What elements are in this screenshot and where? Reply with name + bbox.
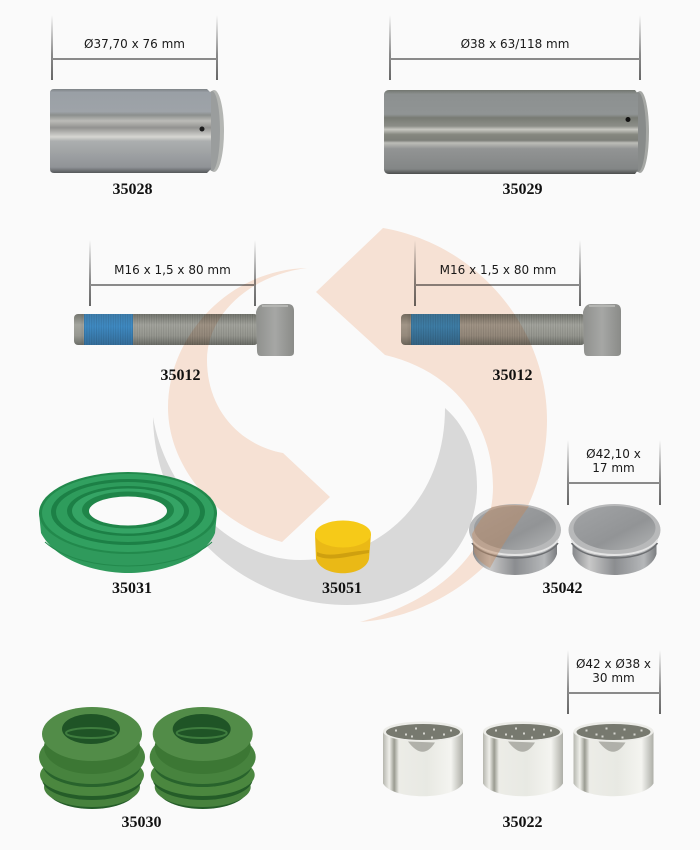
dimension: 35022: 30 mm — [592, 671, 635, 685]
part: bushing 3 35022 — [574, 722, 654, 796]
part: yellow plug 35051 — [315, 520, 371, 573]
label: 35042: 35042 — [542, 580, 582, 597]
label: 35012 left: 35012 — [160, 367, 200, 384]
label: 35029: 35029 — [502, 181, 542, 198]
part: bushing 1 35022 — [383, 722, 463, 796]
label: 35031: 35031 — [112, 580, 152, 597]
dimension: bolt left: M16 x 1,5 x 80 mm — [114, 263, 231, 277]
part: pin 35029 — [384, 90, 649, 174]
part: green boot left 35030 — [39, 707, 145, 809]
part: bolt left — [74, 304, 294, 356]
dimension: 35042: Ø42,10 x — [586, 447, 641, 461]
part: bushing 2 35022 — [483, 722, 563, 796]
dimension: 35042 — [567, 440, 661, 505]
dimension: 35022: Ø42 x Ø38 x — [576, 657, 651, 671]
label: 35028: 35028 — [112, 181, 152, 198]
label: 35030: 35030 — [122, 814, 162, 831]
dimension: 35042: 17 mm — [592, 461, 635, 475]
dimension: 35028: Ø37,70 x 76 mm — [84, 37, 185, 51]
watermark logo — [153, 228, 547, 622]
part: green seal 35031 — [39, 472, 217, 573]
dimension: 35022 — [567, 650, 661, 714]
label: 35051: 35051 — [322, 580, 362, 597]
label: 35022: 35022 — [502, 814, 542, 831]
part: pin 35028 — [50, 89, 224, 173]
part: cap right 35042 — [568, 504, 660, 575]
part: bolt right — [401, 304, 621, 356]
dimension: 35029: Ø38 x 63/118 mm — [461, 37, 569, 51]
label: 35012 right: 35012 — [492, 367, 532, 384]
dimension: bolt right: M16 x 1,5 x 80 mm — [440, 263, 556, 277]
part: green boot right 35030 — [150, 707, 256, 809]
part: cap left 35042 — [469, 504, 561, 575]
